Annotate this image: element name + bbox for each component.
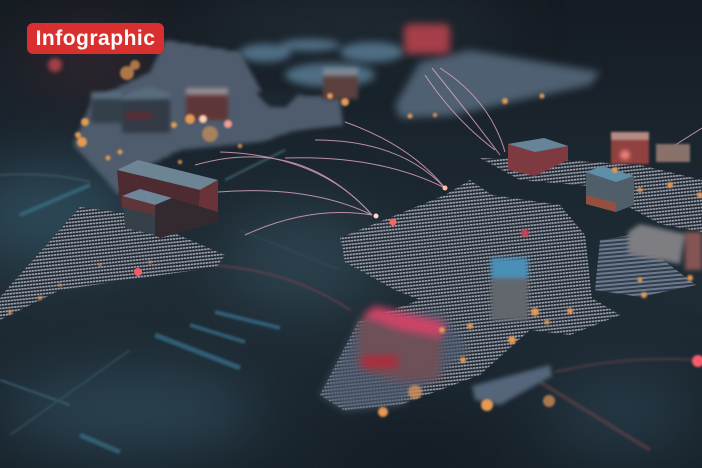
map: north america (blurred) bbox=[73, 40, 343, 195]
map: soft focus areas bbox=[320, 310, 470, 411]
containers: top left (blurred) bbox=[91, 68, 358, 133]
container: top red (blurred) bbox=[404, 24, 450, 54]
container stack: main bbox=[117, 160, 218, 238]
map: asia bbox=[480, 158, 702, 232]
badge: Infographic: Infographic bbox=[36, 27, 155, 50]
map: arctic islands (blurred) bbox=[239, 39, 404, 87]
bokeh lights bbox=[8, 60, 702, 417]
badge: Infographic bbox=[27, 23, 164, 54]
map: australia bbox=[595, 235, 696, 297]
map: africa and europe bbox=[320, 180, 620, 411]
map: south america bbox=[0, 207, 225, 320]
shipping arcs bbox=[195, 68, 702, 235]
background chart traces bbox=[0, 150, 695, 452]
map: small island bbox=[472, 365, 552, 405]
containers: lower right (blurred) bbox=[491, 224, 702, 320]
red glow nodes bbox=[48, 58, 702, 367]
map: top continent (blurred) bbox=[395, 50, 600, 118]
containers: right side bbox=[508, 132, 690, 212]
container: pink foreground (blurred) bbox=[358, 306, 445, 382]
